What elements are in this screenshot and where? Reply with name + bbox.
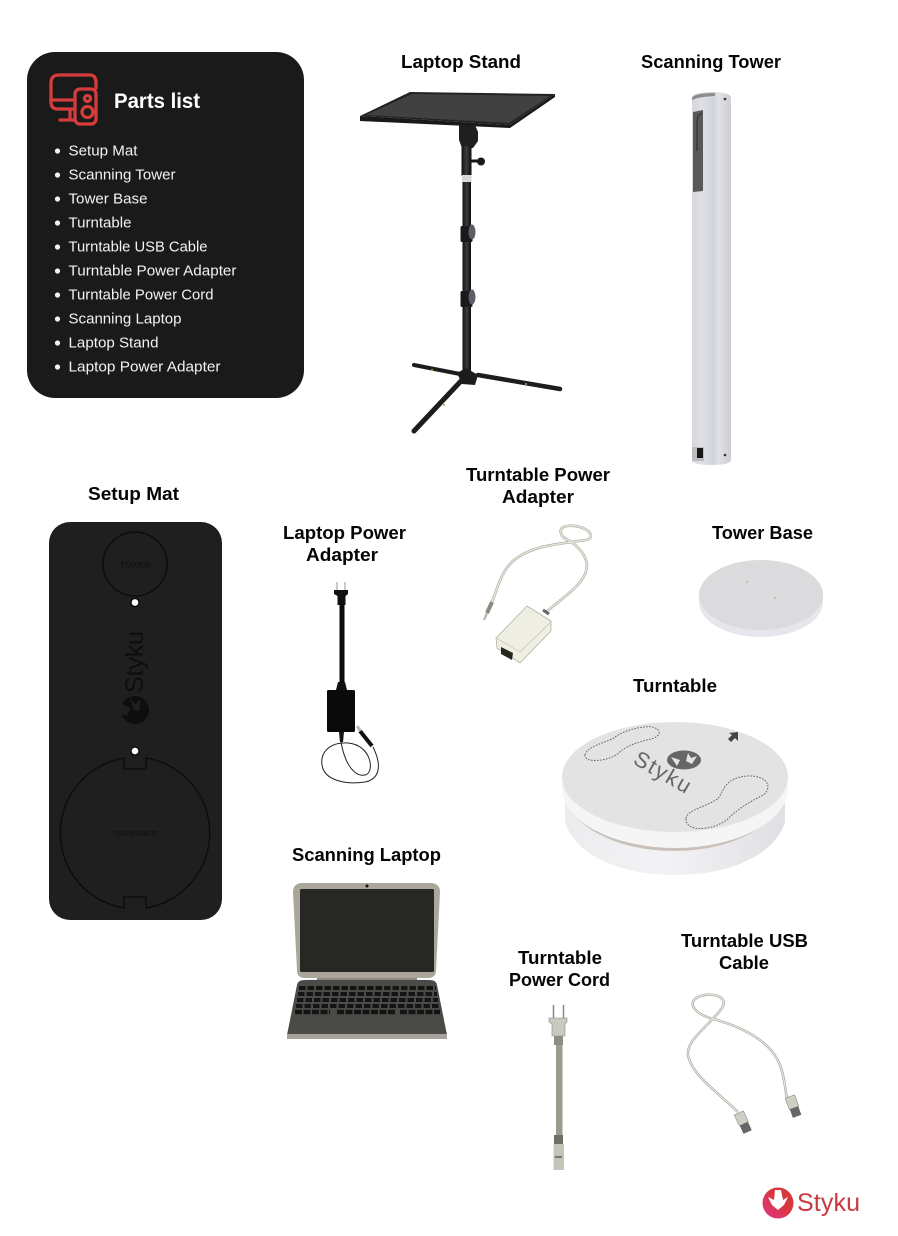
list of parts: Turntable USB Cable [68, 240, 208, 256]
list of parts: Turntable Power Cord [68, 288, 214, 304]
list of parts: Scanning Tower [68, 168, 176, 184]
heading: turntable power cord: Turntable [518, 948, 602, 968]
mat logo: Styku [121, 631, 149, 693]
heading: laptop power adapter: Adapter [306, 545, 378, 565]
image: tower base [699, 560, 823, 637]
list of parts: Tower Base [68, 192, 148, 208]
image: laptop stand [360, 92, 560, 431]
list of parts [55, 144, 237, 376]
heading: parts list: Parts list [114, 90, 200, 113]
arrow marker [728, 732, 738, 742]
list of parts: Turntable Power Adapter [68, 264, 237, 280]
list of parts: Laptop Stand [68, 336, 158, 352]
heading: turntable power adapter [466, 465, 610, 507]
heading: scanning tower: Scanning Tower [641, 52, 781, 72]
tower outline [103, 532, 167, 596]
mat logo [121, 631, 149, 724]
brand logo [762, 1188, 860, 1218]
image: scanning tower [692, 92, 731, 465]
image: turntable power cord [549, 1005, 567, 1170]
heading: turntable power cord [509, 948, 610, 990]
heading: turntable power adapter: Turntable Power [466, 465, 610, 485]
heading: scanning laptop: Scanning Laptop [292, 845, 441, 865]
heading: laptop stand: Laptop Stand [401, 52, 521, 72]
image: turntable [562, 722, 788, 875]
list of parts: Scanning Laptop [68, 312, 182, 328]
heading: turntable power adapter: Adapter [502, 487, 574, 507]
image: scanning laptop [287, 883, 447, 1039]
image: turntable usb cable [688, 995, 802, 1134]
footprints [585, 727, 768, 829]
heading: turntable power cord: Power Cord [509, 970, 610, 990]
heading: turntable usb cable: Turntable USB [681, 931, 808, 951]
heading: turntable usb cable [681, 931, 808, 973]
heading: laptop power adapter [283, 523, 406, 565]
panel: parts list [27, 52, 304, 398]
image: laptop power adapter [322, 582, 378, 783]
list of parts: Setup Mat [68, 144, 138, 160]
list of parts: Turntable [68, 216, 132, 232]
heading: setup mat: Setup Mat [88, 484, 179, 504]
heading: turntable usb cable: Cable [719, 953, 769, 973]
turntable outline [60, 758, 210, 908]
image: setup mat [49, 522, 222, 920]
image: turntable power adapter [484, 526, 591, 663]
heading: turntable: Turntable [633, 676, 717, 696]
brand logo: Styku [797, 1189, 860, 1217]
tower outline: TOWER [120, 561, 150, 570]
list of parts: Laptop Power Adapter [68, 360, 221, 376]
turntable outline: TURNTABLE [113, 829, 157, 838]
heading: laptop power adapter: Laptop Power [283, 523, 406, 543]
heading: tower base: Tower Base [712, 523, 813, 543]
turntable logo: Styku [630, 746, 696, 798]
icon: monitor and speaker [51, 75, 96, 124]
